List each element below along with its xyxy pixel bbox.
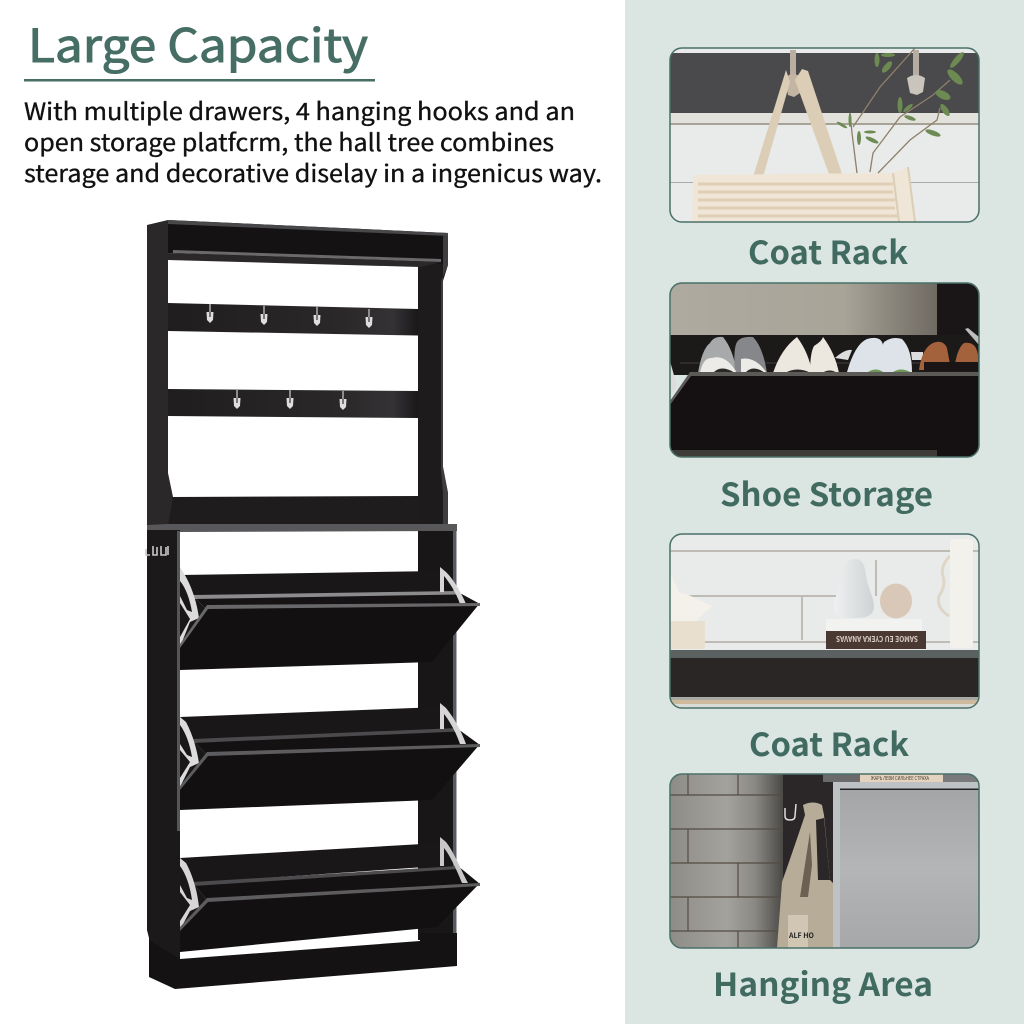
white bird vase xyxy=(834,559,874,618)
photo: shoe storage drawer xyxy=(670,283,980,457)
photo: decorative shelf xyxy=(670,534,979,708)
description text xyxy=(24,92,602,189)
title underline xyxy=(24,79,375,82)
drawer 3 xyxy=(180,837,480,952)
photo: hanging area xyxy=(670,774,979,948)
shelf xyxy=(670,650,979,658)
description text: With multiple drawers, 4 hanging hooks and an xyxy=(24,92,575,127)
shoes cream xyxy=(773,337,852,373)
shoes white xyxy=(847,338,923,372)
photo frame 4 xyxy=(670,774,979,948)
photo frame 2 xyxy=(670,283,979,457)
books xyxy=(826,619,926,649)
book on top: ЖАРЬ ЛЕВИ СИЛЬНЕЕ СТРАХА xyxy=(871,775,930,782)
hooks upper row xyxy=(206,304,372,328)
drawer 2 xyxy=(180,703,480,810)
books: SAMOE EU CYEKA ANAVAS xyxy=(836,633,918,644)
top shelf xyxy=(168,220,448,267)
shoes brown xyxy=(919,342,978,370)
side hooks xyxy=(146,546,168,555)
label: shoe storage: Shoe Storage xyxy=(720,470,933,516)
tote handles xyxy=(753,69,843,177)
open storage platform xyxy=(168,496,420,526)
wall hook xyxy=(785,804,796,820)
beige bird xyxy=(880,584,912,618)
photo: coat rack hooks with tote xyxy=(670,48,979,222)
base plinth xyxy=(149,933,457,989)
label: coat rack: Coat Rack xyxy=(748,228,909,274)
lower left post xyxy=(147,530,180,960)
plant branches and leaves xyxy=(850,48,950,173)
label: coat rack second: Coat Rack xyxy=(749,720,910,766)
product: black hall tree shoe cabinet xyxy=(146,220,480,989)
hook left xyxy=(787,50,800,97)
hook rail upper xyxy=(168,303,418,336)
description text: sterage and decorative diselay in a ingenicus way. xyxy=(24,154,602,189)
shoes grey xyxy=(698,337,767,373)
drawer front xyxy=(670,372,979,457)
wavy vase xyxy=(938,539,973,648)
title: Large Capacity xyxy=(28,10,368,76)
lower right post xyxy=(418,531,453,940)
hanging tote xyxy=(777,802,833,948)
description text: open storage platfcrm, the hall tree combines xyxy=(24,123,554,158)
hook rail lower xyxy=(168,389,418,418)
hanging tote: ALF HO xyxy=(788,931,814,941)
drawer 1 xyxy=(180,567,480,670)
tote body xyxy=(692,167,915,222)
upper left post xyxy=(147,220,173,527)
tissue box xyxy=(670,572,712,649)
photo frame 3 xyxy=(670,534,979,708)
panel: right sidebar background xyxy=(625,0,1024,1024)
upper right post xyxy=(418,262,448,526)
hook right xyxy=(907,50,925,95)
photo frame 1 xyxy=(670,48,979,222)
door panel xyxy=(833,782,979,948)
hooks lower row xyxy=(234,390,346,410)
book on top xyxy=(823,774,979,782)
label: hanging area: Hanging Area xyxy=(713,960,933,1006)
counter top xyxy=(147,524,457,532)
